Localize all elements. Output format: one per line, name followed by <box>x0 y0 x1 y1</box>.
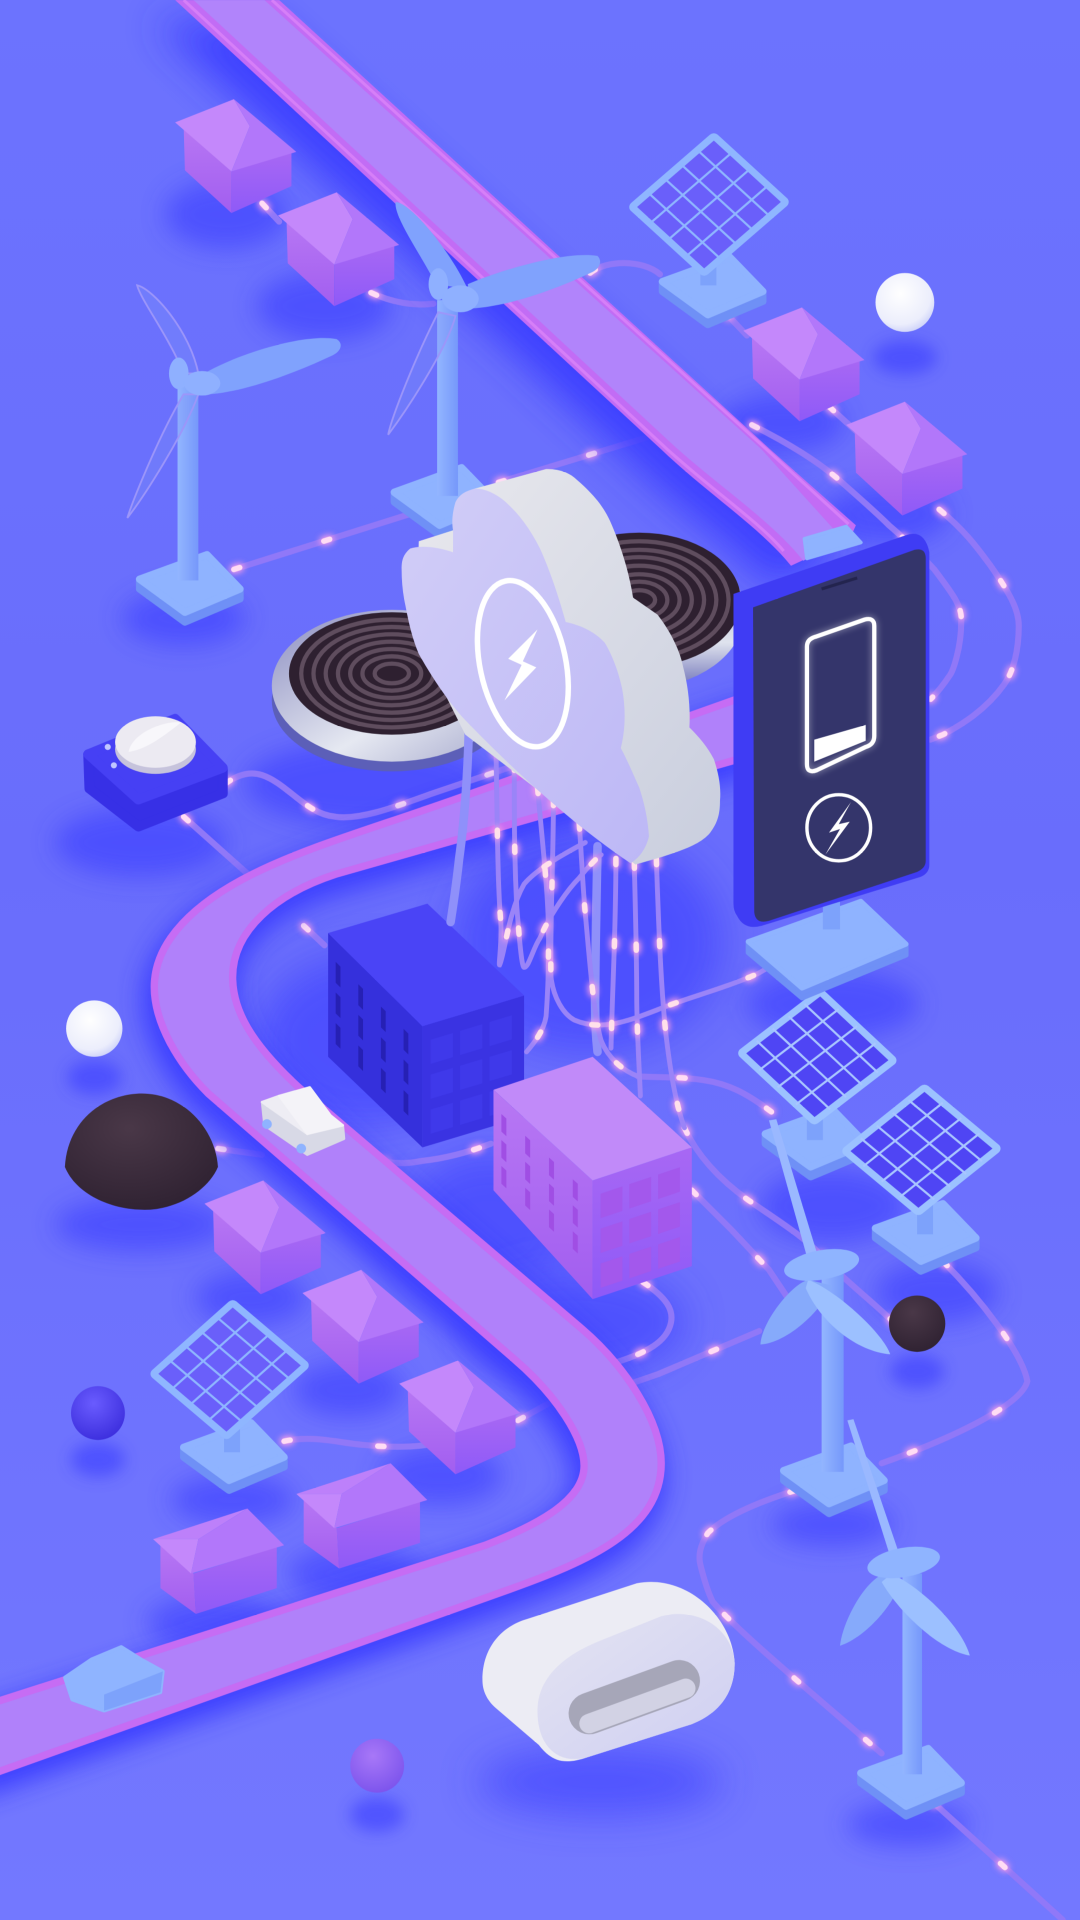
house 7 <box>399 1360 520 1474</box>
icon: charge bolt circle <box>807 795 871 861</box>
solar panel left <box>153 1303 306 1490</box>
dark hemisphere <box>65 1093 218 1210</box>
house 8 <box>296 1463 427 1569</box>
ball dark right <box>889 1296 945 1352</box>
rotary knob switch <box>88 716 223 827</box>
ball purple bottom <box>350 1739 404 1793</box>
block behind phone <box>804 527 861 558</box>
smartphone <box>733 534 929 927</box>
cloud side <box>416 469 720 864</box>
main road <box>0 696 747 1788</box>
wind turbine 4 <box>840 1419 970 1816</box>
coil disk right <box>534 533 744 688</box>
house 2 <box>278 192 399 306</box>
purple building <box>493 1057 692 1299</box>
ground shadows <box>55 180 998 1847</box>
solar panel right 1 <box>741 992 894 1177</box>
house 9 <box>153 1509 284 1614</box>
house 3 <box>743 307 864 421</box>
house 5 <box>204 1180 326 1294</box>
house 4 <box>846 402 967 516</box>
phone speaker <box>822 578 857 589</box>
cloud front <box>402 489 649 863</box>
solar panel right 2 <box>845 1087 998 1271</box>
phone stand <box>748 900 906 998</box>
coil disk left <box>272 610 512 771</box>
top road <box>156 0 856 588</box>
cloud charge ring <box>463 572 582 755</box>
ball white top <box>876 273 934 332</box>
wind turbine 2 <box>388 202 600 535</box>
energy cloud <box>402 469 720 864</box>
wind turbine 3 <box>760 1119 890 1513</box>
house 1 <box>175 99 296 213</box>
house 6 <box>302 1270 424 1384</box>
ball blue left <box>71 1386 125 1440</box>
white car <box>262 1087 344 1155</box>
ball white left <box>66 1000 122 1057</box>
wind turbine 1 <box>127 285 341 622</box>
white capsule ring <box>482 1582 735 1761</box>
wires from cloud to buildings <box>451 724 833 1128</box>
solar panel top <box>632 136 786 324</box>
icon: lightning bolt <box>504 629 538 700</box>
blue car <box>65 1647 163 1711</box>
icon: low battery <box>807 619 874 771</box>
blue building <box>328 904 524 1147</box>
power wires <box>184 203 1063 1920</box>
